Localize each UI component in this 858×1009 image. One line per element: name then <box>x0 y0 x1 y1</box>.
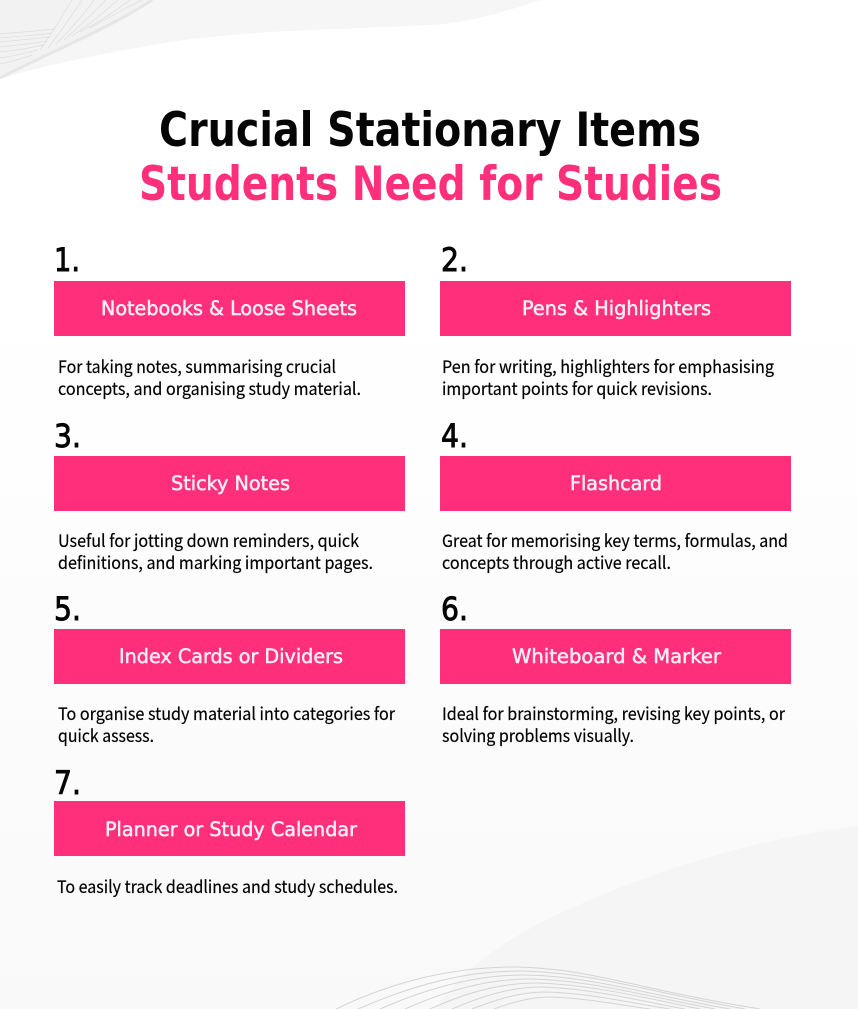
banner: Sticky Notes <box>54 456 405 511</box>
number 2: 2. <box>441 241 468 279</box>
panel: item 4 <box>440 417 791 574</box>
banner: Flashcard <box>440 456 791 511</box>
number 6: 6. <box>441 590 468 628</box>
number 7: 7. <box>54 764 81 802</box>
banner: Planner or Study Calendar <box>54 801 405 856</box>
banner: Notebooks & Loose Sheets: Notebooks & Loose Sheets <box>101 297 357 320</box>
number 3: 3. <box>54 417 81 455</box>
banner: Index Cards or Dividers: Index Cards or Dividers <box>119 645 343 668</box>
banner: Pens & Highlighters <box>440 281 791 336</box>
title <box>139 103 722 212</box>
description 2: important points for quick revisions. <box>442 375 712 400</box>
title: Students Need for Studies <box>139 157 722 212</box>
description 3: Useful for jotting down reminders, quick <box>58 527 360 552</box>
banner: Index Cards or Dividers <box>54 629 405 684</box>
description 5: quick assess. <box>58 722 154 747</box>
panel: item 7 <box>54 764 405 898</box>
title: Crucial Stationary Items <box>159 103 701 158</box>
description 5: To organise study material into categories for <box>58 700 395 725</box>
description 3 <box>58 527 373 574</box>
description 4 <box>442 527 788 574</box>
description 2: Pen for writing, highlighters for emphasising <box>442 353 774 378</box>
panel: item 6 <box>440 590 791 747</box>
description 7: To easily track deadlines and study schedules. <box>57 873 398 898</box>
description 1: concepts, and organising study material. <box>58 375 361 400</box>
number 1: 1. <box>54 241 80 279</box>
banner: Planner or Study Calendar: Planner or Study Calendar <box>105 818 358 841</box>
description 6 <box>442 700 785 747</box>
banner: Pens & Highlighters: Pens & Highlighters <box>522 297 711 320</box>
banner: Flashcard: Flashcard <box>570 472 662 495</box>
panel: item 2 <box>440 241 791 400</box>
description 2 <box>442 353 774 400</box>
banner: Sticky Notes: Sticky Notes <box>171 472 290 495</box>
banner: Whiteboard & Marker: Whiteboard & Marker <box>512 645 722 668</box>
description 6: solving problems visually. <box>442 722 634 747</box>
description 1 <box>58 353 361 400</box>
description 6: Ideal for brainstorming, revising key points, or <box>442 700 785 725</box>
panel: item 5 <box>54 590 405 747</box>
banner: Whiteboard & Marker <box>440 629 791 684</box>
number 4: 4. <box>441 417 468 455</box>
description 4: concepts through active recall. <box>442 549 671 574</box>
description 4: Great for memorising key terms, formulas, and <box>442 527 788 552</box>
panel: item 3 <box>54 417 405 574</box>
description 1: For taking notes, summarising crucial <box>58 353 336 378</box>
description 3: definitions, and marking important pages. <box>58 549 373 574</box>
panel: item 1 <box>54 241 405 400</box>
banner: Notebooks & Loose Sheets <box>54 281 405 336</box>
description 5 <box>58 700 395 747</box>
number 5: 5. <box>54 590 81 628</box>
